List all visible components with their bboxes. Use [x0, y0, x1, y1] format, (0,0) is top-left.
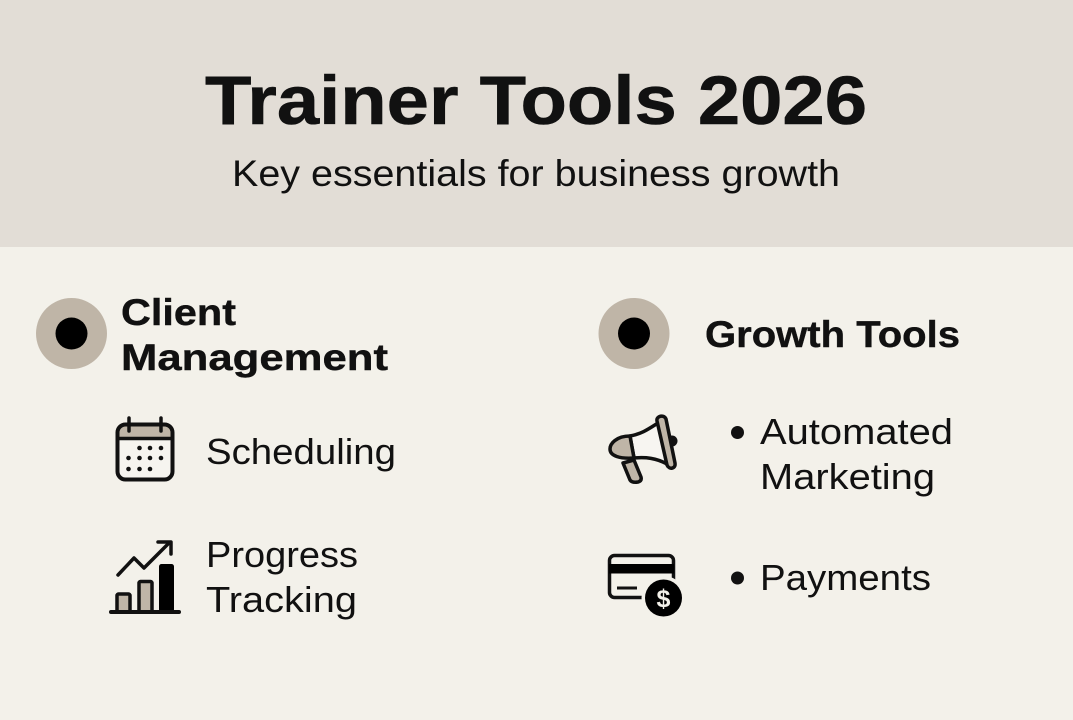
panel: client management [36, 292, 396, 620]
icon: megaphone [610, 416, 678, 482]
icon: calendar [117, 418, 173, 480]
heading: client management: Client [121, 292, 236, 333]
heading: growth tools: Growth Tools [705, 314, 960, 355]
label: automated marketing: Automated [760, 411, 953, 452]
header band [0, 0, 1073, 247]
section marker: growth tools [598, 298, 670, 369]
label: progress tracking: Progress [206, 534, 358, 575]
bullet: automated marketing [731, 426, 744, 439]
label: payments: Payments [760, 557, 931, 598]
title: Trainer Tools 2026 [205, 62, 867, 139]
label: scheduling: Scheduling [206, 431, 396, 472]
label: automated marketing: Marketing [760, 456, 935, 497]
panel: growth tools [598, 298, 960, 620]
heading: client management: Management [121, 337, 388, 378]
bullet: payments [731, 572, 744, 584]
label: progress tracking: Tracking [206, 579, 357, 620]
icon: progress chart [111, 542, 179, 612]
icon: credit card with dollar: $ [657, 585, 671, 613]
icon: credit card with dollar [609, 556, 686, 620]
section marker: client management [36, 298, 107, 369]
subtitle: Key essentials for business growth [232, 153, 840, 194]
